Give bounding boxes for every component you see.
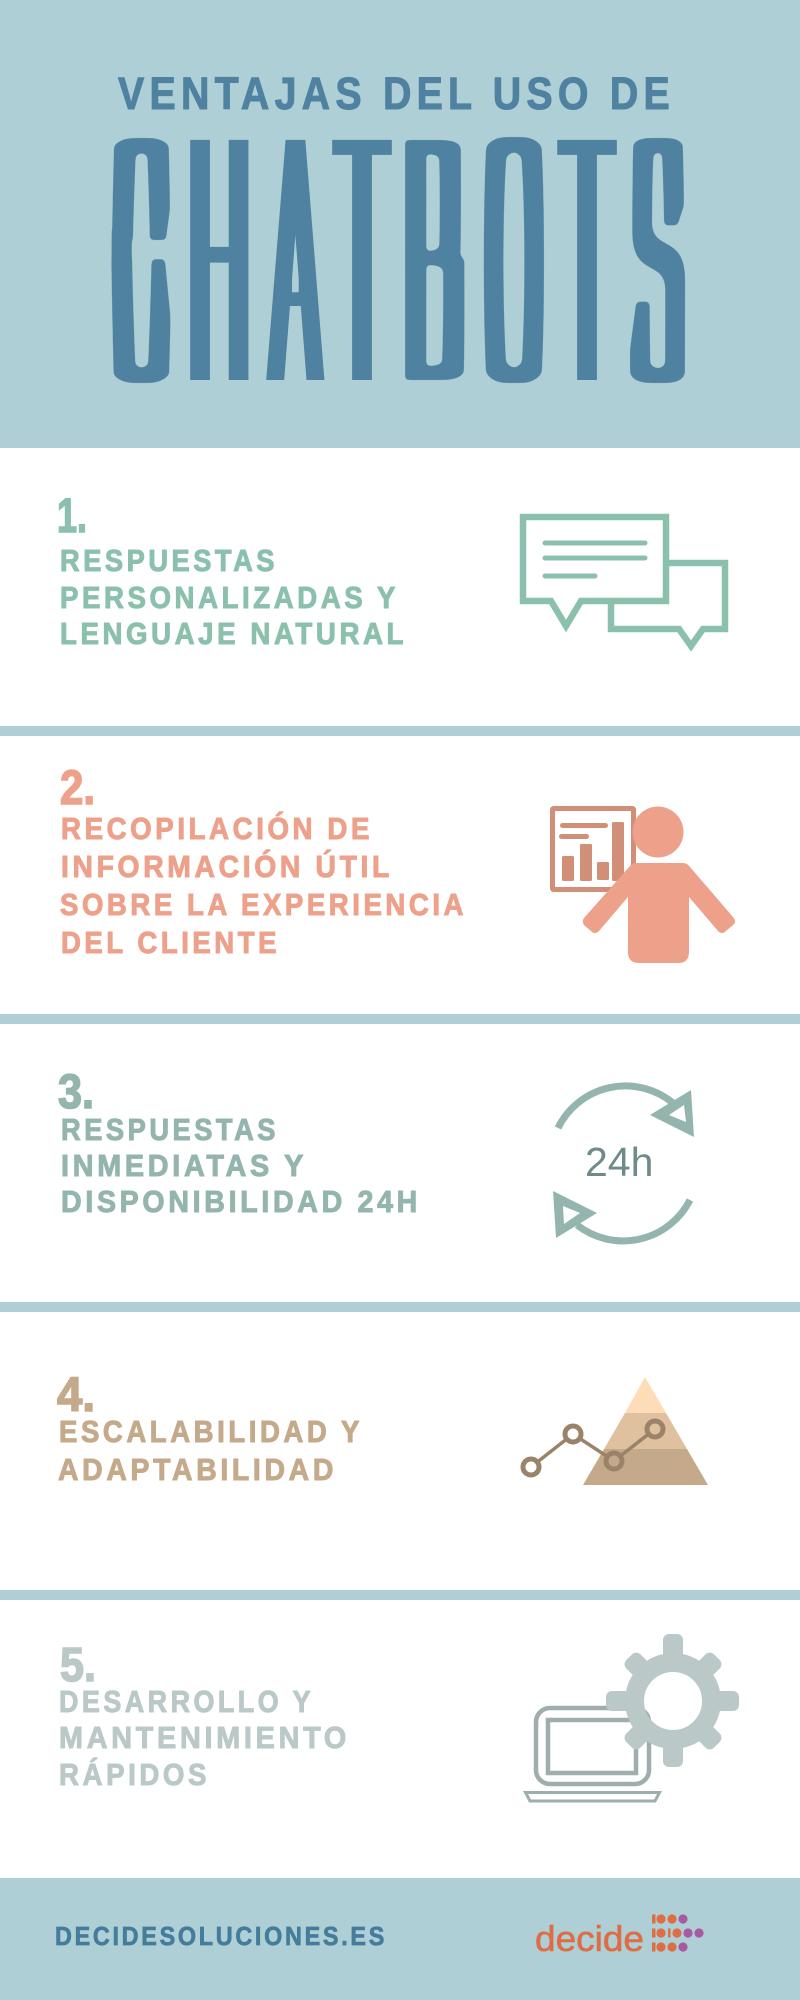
text: respuestas inmediatas y disponibilidad 24h [61, 1112, 421, 1219]
laptop [526, 1708, 660, 1801]
panel: item 2 text [60, 762, 467, 960]
text: respuestas personalizadas y lenguaje natural: PERSONALIZADAS Y [60, 580, 399, 615]
panel: item 5 text [59, 1639, 350, 1792]
title: chatbots: B [404, 227, 463, 290]
logo: decide: decide [535, 1918, 644, 1959]
text: desarrollo y mantenimiento rapidos: MANTENIMIENTO [59, 1720, 350, 1755]
title: chatbots: C [114, 99, 168, 400]
logo: decide [535, 1914, 704, 1959]
panel: header [0, 0, 800, 448]
text: recopilacion de informacion util sobre la experiencia del cliente: INFORMACIÓN ÚTIL [61, 848, 393, 884]
icon: laptop and gear [526, 1634, 739, 1801]
text: escalabilidad y adaptabilidad: ESCALABILIDAD Y [59, 1414, 363, 1449]
title: chatbots: O [487, 131, 541, 194]
text: recopilacion de informacion util sobre la experiencia del cliente [60, 810, 467, 960]
icon: chat bubbles [523, 517, 725, 646]
text: respuestas inmediatas y disponibilidad 24h: RESPUESTAS [61, 1112, 279, 1147]
panel: item 1 text [57, 490, 407, 651]
text: respuestas personalizadas y lenguaje natural [60, 543, 407, 651]
gear [606, 1634, 739, 1767]
number 4: 4. [57, 1369, 95, 1422]
title: chatbots: B [404, 133, 463, 196]
text: desarrollo y mantenimiento rapidos [59, 1684, 350, 1792]
text: recopilacion de informacion util sobre la experiencia del cliente: SOBRE LA EXPERIENCIA [60, 887, 467, 922]
number 2: 2. [60, 762, 95, 815]
number 5: 5. [60, 1639, 96, 1692]
title: chatbots: C [113, 131, 167, 194]
panel: item 3 text [58, 1066, 421, 1219]
icon: 24h cycle arrows [553, 1086, 694, 1241]
chart board [552, 808, 634, 890]
number 3: 3. [58, 1066, 94, 1119]
title: chatbots: T [336, 53, 388, 465]
heading: ventajas del uso de: VENTAJAS DEL USO DE [118, 68, 675, 119]
text: respuestas inmediatas y disponibilidad 24h: INMEDIATAS Y [61, 1148, 307, 1183]
title: chatbots [111, 136, 686, 384]
text: respuestas personalizadas y lenguaje natural: RESPUESTAS [60, 543, 278, 578]
text: respuestas personalizadas y lenguaje natural: LENGUAJE NATURAL [60, 616, 407, 651]
footer url: DECIDESOLUCIONES.ES [55, 1921, 387, 1951]
title: chatbots: S [633, 131, 682, 194]
number 1: 1. [57, 490, 87, 543]
title: chatbots: O [487, 327, 541, 390]
text: desarrollo y mantenimiento rapidos: RÁPIDOS [59, 1757, 210, 1792]
person [583, 806, 735, 963]
title: chatbots: S [633, 158, 682, 357]
title: chatbots: B [404, 324, 463, 387]
title: chatbots: T [561, 53, 613, 465]
text: recopilacion de informacion util sobre la experiencia del cliente: RECOPILACIÓN DE [61, 810, 373, 846]
text: recopilacion de informacion util sobre la experiencia del cliente: DEL CLIENTE [61, 925, 280, 960]
title: chatbots: A [271, 55, 320, 466]
panel: footer [0, 1878, 800, 2000]
title: chatbots: H [189, 54, 249, 465]
text: respuestas inmediatas y disponibilidad 24h: DISPONIBILIDAD 24H [61, 1184, 421, 1219]
title: chatbots: C [113, 326, 167, 389]
icon: person presenting chart [552, 806, 735, 963]
title: chatbots: S [633, 327, 682, 389]
text: desarrollo y mantenimiento rapidos: DESARROLLO Y [59, 1684, 314, 1719]
text: escalabilidad y adaptabilidad [58, 1414, 363, 1487]
label: 24h: 24h [585, 1139, 653, 1185]
icon: pyramid and line chart [523, 1377, 708, 1485]
text: escalabilidad y adaptabilidad: ADAPTABILIDAD [58, 1452, 337, 1487]
panel: item 4 text [57, 1369, 363, 1487]
